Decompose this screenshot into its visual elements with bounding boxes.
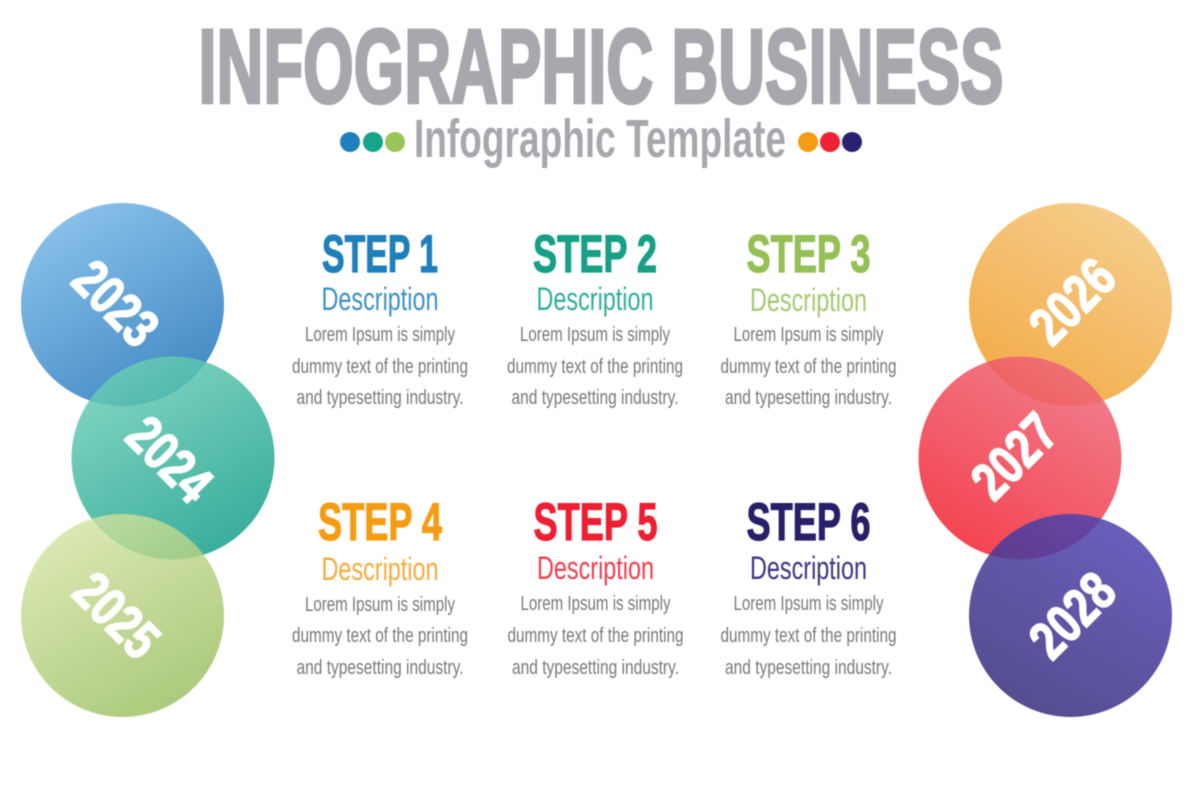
year circles: left <box>21 203 274 717</box>
circle 2028 <box>969 514 1172 717</box>
step 3 block: dummy text of the printing <box>720 356 896 378</box>
step 1 block: dummy text of the printing <box>292 356 468 378</box>
step 1 block <box>292 225 468 409</box>
circle 2027: 2027 <box>960 402 1070 512</box>
step 5 block: dummy text of the printing <box>508 625 684 647</box>
step 6 block: dummy text of the printing <box>720 625 896 647</box>
step 3 block: Description <box>750 282 867 318</box>
step 2 block: and typesetting industry. <box>512 387 678 409</box>
subtitle text: Infographic Template <box>414 109 786 169</box>
step 2 block: Description <box>536 281 654 317</box>
step 4 block: STEP 4 <box>318 493 442 552</box>
step 3 block <box>720 225 896 409</box>
step 2 block: STEP 2 <box>533 225 657 284</box>
step 1 block: and typesetting industry. <box>296 387 464 409</box>
step 3 block: and typesetting industry. <box>725 387 892 409</box>
circle 2024: 2024 <box>114 405 224 515</box>
circle 2025 <box>21 514 224 717</box>
circle 2023: 2023 <box>60 249 170 359</box>
circle 2023 <box>21 203 224 406</box>
step 6 block: Lorem Ipsum is simply <box>734 593 884 615</box>
step 5 block: STEP 5 <box>534 493 658 552</box>
step 2 block: dummy text of the printing <box>507 356 683 378</box>
step 5 block: and typesetting industry. <box>512 657 679 679</box>
step 1 block: STEP 1 <box>322 225 438 284</box>
step 6 block: Description <box>750 550 867 586</box>
circle 2024 <box>72 356 274 560</box>
circle 2027 <box>918 356 1122 560</box>
step 6 block: and typesetting industry. <box>725 657 892 679</box>
step 3 block: STEP 3 <box>746 225 870 284</box>
circle 2026: 2026 <box>1018 247 1128 357</box>
circle 2028: 2028 <box>1018 561 1128 671</box>
subtitle with coloured dots <box>340 109 862 169</box>
step 5 block: Lorem Ipsum is simply <box>520 593 670 615</box>
step 5 block <box>508 493 684 679</box>
step 3 block: Lorem Ipsum is simply <box>734 324 884 346</box>
circle 2025: 2025 <box>61 561 171 671</box>
step 4 block: Description <box>322 551 438 587</box>
step 1 block: Lorem Ipsum is simply <box>305 324 455 346</box>
step 4 block: dummy text of the printing <box>292 625 468 647</box>
step 2 block: Lorem Ipsum is simply <box>520 324 670 346</box>
step 6 block <box>720 493 896 679</box>
circle 2026 <box>969 203 1172 406</box>
step 4 block <box>292 493 468 679</box>
step 5 block: Description <box>537 550 654 586</box>
step 6 block: STEP 6 <box>746 493 870 552</box>
step 4 block: and typesetting industry. <box>296 657 464 679</box>
year circles: right <box>918 203 1172 717</box>
step 2 block <box>507 225 683 409</box>
step 1 block: Description <box>322 281 438 317</box>
step 4 block: Lorem Ipsum is simply <box>305 594 455 616</box>
